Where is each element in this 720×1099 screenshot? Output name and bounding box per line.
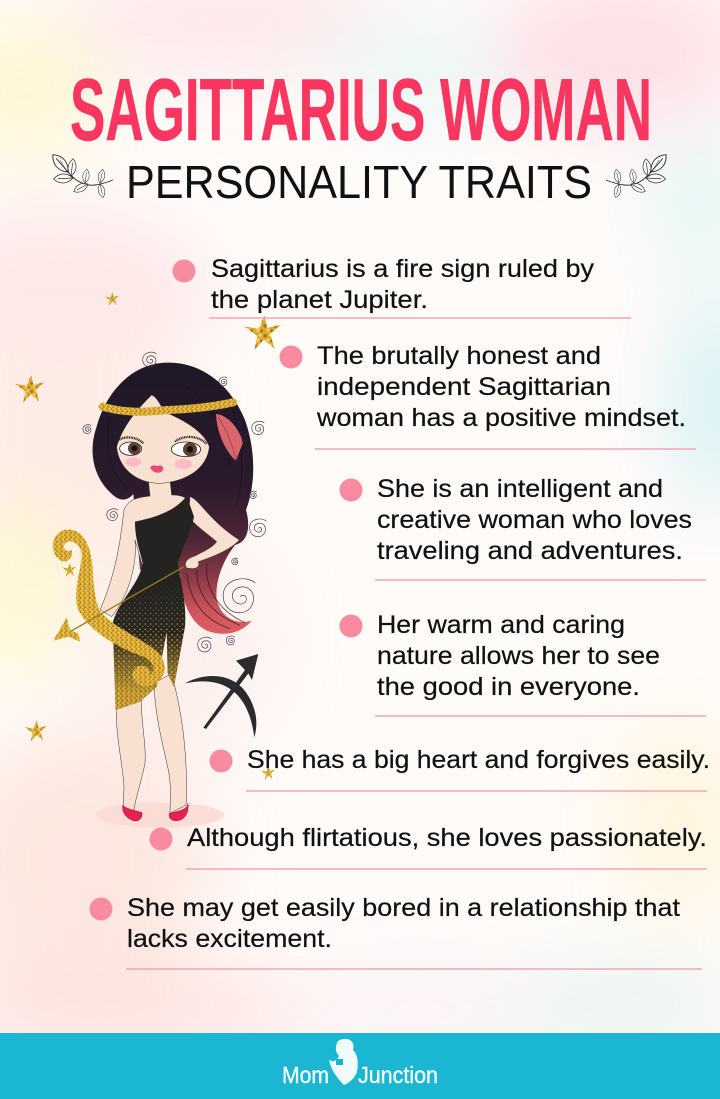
trait 2: [280, 342, 696, 449]
trait 6: [150, 824, 707, 869]
shoes: [123, 803, 188, 821]
face: [117, 395, 209, 483]
feather: [216, 414, 243, 461]
bow: [53, 529, 165, 687]
trait 5: [210, 746, 710, 791]
MomJunction logo: Mom: [282, 1062, 329, 1088]
icon: Sagittarius symbol: [185, 654, 258, 737]
floor shadow: [96, 802, 224, 828]
trait 3: traveling and adventures.: [377, 537, 683, 565]
trait 3: She is an intelligent and: [377, 475, 663, 503]
headband: [103, 402, 233, 412]
MomJunction logo: Junction: [358, 1062, 438, 1088]
dress: [107, 496, 194, 713]
trait 5: She has a big heart and forgives easily.: [247, 746, 710, 774]
trait 2: woman has a positive mindset.: [316, 404, 686, 432]
trait 1: Sagittarius is a fire sign ruled by: [211, 255, 595, 283]
trait 4: the good in everyone.: [377, 673, 640, 701]
hair strands: [107, 387, 245, 629]
trait 6: Although flirtatious, she loves passionately.: [187, 824, 707, 852]
footer band: [0, 1033, 720, 1099]
trait 7: lacks excitement.: [127, 925, 332, 953]
trait 4: nature allows her to see: [377, 642, 660, 670]
trait 2: The brutally honest and: [317, 342, 601, 370]
arrow: [53, 567, 184, 642]
MomJunction logo: [282, 1039, 438, 1088]
hair curls: [83, 352, 266, 652]
gold star on bow: [62, 563, 77, 577]
trait 4: Her warm and caring: [377, 611, 625, 639]
trait 7: [90, 894, 702, 969]
illustration: woman with bow: [53, 352, 266, 828]
trait 1: the planet Jupiter.: [211, 286, 428, 314]
trait 1: [172, 255, 631, 318]
arms and neck: [100, 480, 239, 617]
icon: right laurel: [606, 151, 670, 198]
trait 3: [340, 475, 706, 580]
legs: [116, 673, 187, 813]
trait 4: [340, 611, 706, 716]
subtitle: PERSONALITY TRAITS: [126, 156, 592, 208]
gold stars: [15, 292, 282, 780]
hair: [93, 363, 253, 634]
trait 3: creative woman who loves: [377, 506, 692, 534]
eyes, cheeks and mouth: [117, 437, 207, 473]
trait 2: independent Sagittarian: [317, 373, 611, 401]
icon: left laurel: [49, 151, 113, 198]
trait 7: She may get easily bored in a relationship that: [127, 894, 680, 922]
